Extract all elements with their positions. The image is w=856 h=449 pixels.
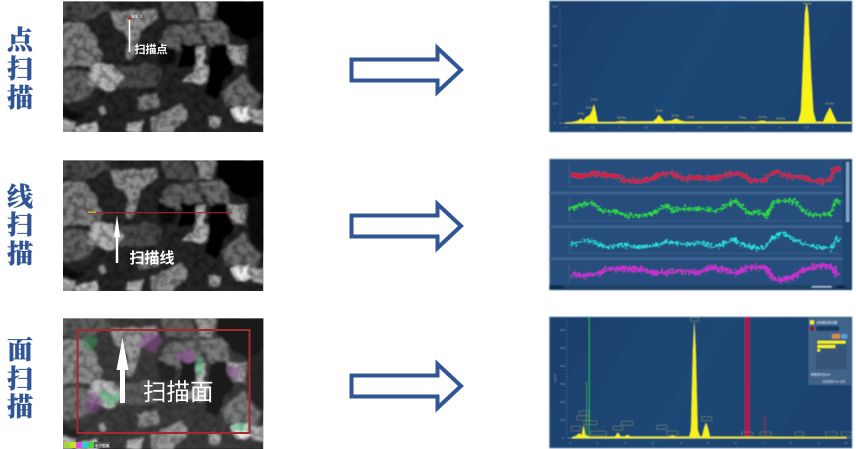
spectrum axis: 300 xyxy=(560,382,565,386)
peak labels: Na Ka xyxy=(618,115,626,119)
caption: area scan xyxy=(7,336,33,422)
caption: point scan: 描 xyxy=(7,83,33,113)
spectrum axis: 600 xyxy=(553,4,558,8)
SEM image: area scan with element map xyxy=(60,317,267,449)
peak labels: Cr Ka xyxy=(759,115,767,119)
peak labels: Ti Ka xyxy=(739,115,746,119)
point scan marker arrow xyxy=(128,14,143,52)
spectrum axis: 1 xyxy=(618,126,620,130)
spectrum axis: 500 xyxy=(553,24,558,28)
chart: point scan EDS spectrum xyxy=(550,1,852,132)
spectrum axis: 400 xyxy=(560,364,565,368)
spectrum peaks xyxy=(572,321,847,438)
area scan label: 扫描面 xyxy=(143,379,214,405)
spectrum axis: 400 xyxy=(553,43,558,47)
spectrum axis: 0 xyxy=(565,126,567,130)
peak labels: Fe Kb xyxy=(826,102,834,106)
peak labels: N Ka xyxy=(586,106,593,110)
legend panel: 总体图谱能谱图 xyxy=(816,319,837,324)
spectrum axis: 4 xyxy=(680,441,682,445)
spectrum axis: cps/eV xyxy=(553,374,557,383)
spectrum axis: 200 xyxy=(553,82,558,86)
scrollbar xyxy=(843,159,852,290)
spectrum axis: 100 xyxy=(553,102,558,106)
spectrum axis: 2.5 xyxy=(697,126,702,130)
green element line xyxy=(589,317,590,437)
point scan marker arrow: 谱图 11 xyxy=(131,14,143,18)
spectrum axis: 100 xyxy=(560,418,565,422)
red profile xyxy=(572,168,839,182)
spectrum axis xyxy=(553,4,852,130)
spectrum axis: 0.5 xyxy=(590,126,595,130)
red element band xyxy=(745,317,750,437)
element colour swatches: 电子图像 xyxy=(95,443,110,448)
arrow: area scan to spectrum xyxy=(352,364,461,408)
peak labels xyxy=(577,2,834,120)
peak labels: Cl Ka xyxy=(671,114,679,118)
spectrum axis: 3 xyxy=(725,126,727,130)
line scan label: 扫描线 xyxy=(130,249,175,267)
spectrum axis: 8 xyxy=(790,441,792,445)
arrow: line scan to profiles xyxy=(352,204,461,248)
spectrum axis: 3 xyxy=(652,441,654,445)
spectrum axis: 1 xyxy=(596,441,598,445)
arrow: point scan to spectrum xyxy=(352,48,461,92)
caption: area scan: 扫 xyxy=(7,364,33,394)
peak labels xyxy=(571,318,851,436)
spectrum axis: 7 xyxy=(832,126,834,130)
SEM image: line scan xyxy=(60,159,267,292)
peak labels: S Ka xyxy=(656,109,663,113)
spectrum axis: 3.5 xyxy=(751,126,755,130)
chart: area scan EDS spectrum xyxy=(550,317,852,448)
peak labels: K Ka xyxy=(687,115,694,119)
spectrum axis: 6 xyxy=(735,441,737,445)
spectrum axis: 10 xyxy=(844,441,848,445)
magenta profile xyxy=(572,265,837,281)
panel axes xyxy=(569,163,842,284)
caption: area scan: 面 xyxy=(7,336,33,365)
spectrum axis: 1.5 xyxy=(644,126,648,130)
spectrum axis: 500 xyxy=(560,346,565,350)
spectrum axis: 6.5 xyxy=(805,126,809,130)
caption: point scan: 点 xyxy=(7,25,36,55)
peak labels: Fe Ka xyxy=(803,2,812,6)
area scan marker arrow xyxy=(116,338,128,403)
status bar xyxy=(549,285,852,290)
scan line xyxy=(88,211,232,214)
caption: line scan: 线 xyxy=(7,183,33,212)
spectrum axis: 2 xyxy=(672,126,674,130)
spectrum axis: 7 xyxy=(762,441,764,445)
caption: area scan: 描 xyxy=(7,392,33,422)
spectrum axis: 5 xyxy=(707,441,709,445)
thin red line xyxy=(764,416,766,437)
element map overlay xyxy=(82,334,247,431)
spectrum axis xyxy=(553,320,852,445)
green profile xyxy=(570,200,841,216)
spectrum axis: 9 xyxy=(818,441,820,445)
legend panel: 总谱能量 Plus 分析 xyxy=(823,380,846,384)
scan area rectangle xyxy=(78,330,250,433)
spectrum axis: 600 xyxy=(560,328,565,332)
spectrum peaks xyxy=(565,3,852,123)
legend panel: 重量百分比(%) xyxy=(811,371,830,376)
spectrum axis: 0 xyxy=(562,436,564,440)
spectrum axis: 0 xyxy=(554,121,556,125)
point scan label: 扫描点 xyxy=(134,42,168,56)
caption: line scan: 扫 xyxy=(7,210,33,240)
caption: line scan xyxy=(7,183,33,269)
peak labels: O Ka xyxy=(591,98,598,102)
caption: point scan xyxy=(7,25,36,113)
caption: line scan: 描 xyxy=(7,239,33,269)
spectrum axis: 0 xyxy=(569,441,571,445)
element colour swatches xyxy=(64,442,110,448)
legend panel xyxy=(808,317,852,385)
spectrum axis: 2 xyxy=(624,441,626,445)
spectrum axis: 300 xyxy=(553,63,558,67)
peak labels: C Ka xyxy=(577,111,584,115)
spectrum axis: 4 xyxy=(779,126,781,130)
caption: point scan: 扫 xyxy=(7,54,33,84)
profile panel separators xyxy=(549,192,843,260)
chart: line scan element profiles xyxy=(549,159,852,290)
line scan marker arrow xyxy=(114,215,120,263)
peak labels: Mn Ka xyxy=(776,116,785,120)
spectrum axis: 200 xyxy=(560,400,565,404)
SEM image: point scan xyxy=(60,0,267,133)
cyan profile xyxy=(570,233,840,248)
